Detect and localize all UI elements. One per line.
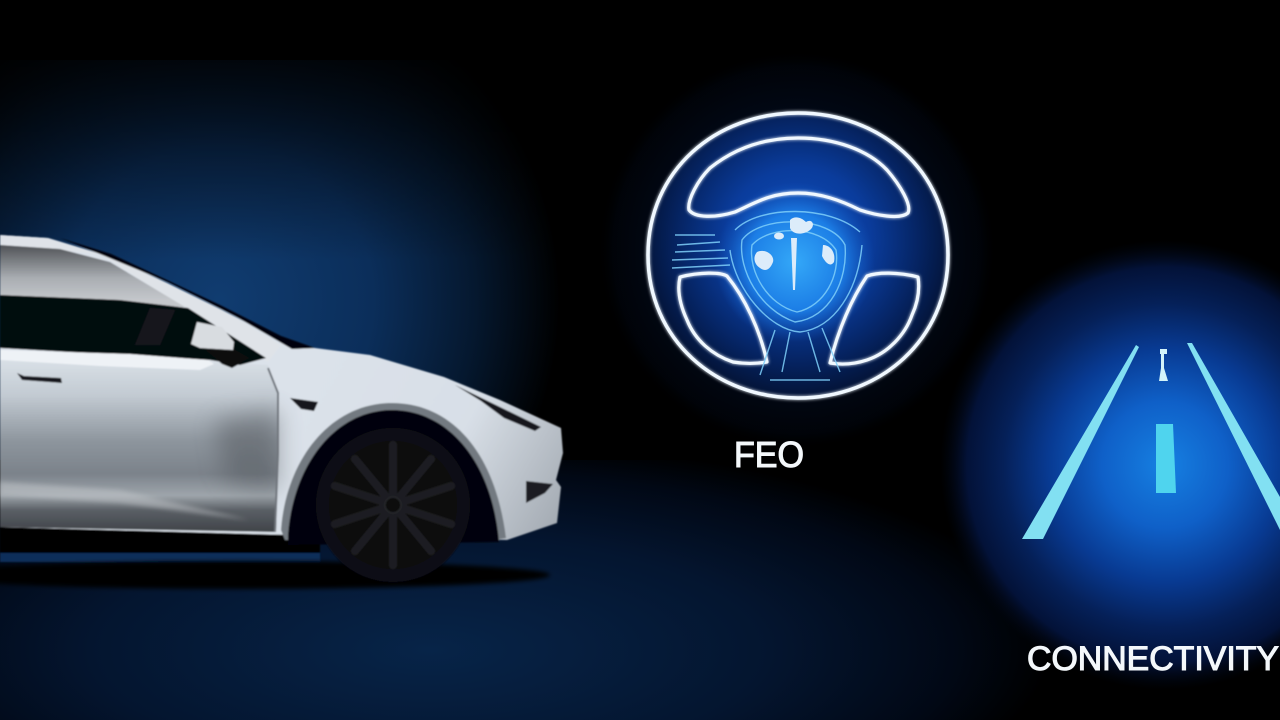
side window [0, 295, 266, 365]
headlight [455, 385, 541, 431]
side camera [290, 398, 318, 411]
roof rail [0, 235, 281, 362]
label: FEO: FEO [734, 434, 804, 475]
spokes [335, 445, 451, 565]
mirror stalk [205, 350, 250, 368]
outer rim [648, 113, 948, 398]
door handle [17, 373, 62, 383]
door shading [215, 410, 278, 490]
car body [0, 235, 563, 540]
upper spoke [689, 138, 909, 216]
door panel [0, 350, 278, 532]
windshield edge [60, 238, 315, 349]
hub lines [672, 211, 862, 380]
hub glow [720, 195, 870, 338]
far dash [1159, 349, 1168, 381]
steering wheel icon [612, 66, 981, 434]
centre dash [1156, 424, 1176, 493]
mirror [191, 322, 234, 350]
hub shapes [754, 217, 834, 290]
upper glass [0, 245, 185, 307]
wheel arch trim [281, 403, 506, 540]
label: connectivity: CONNECTIVITY [1027, 640, 1279, 678]
right hole [830, 273, 919, 364]
door top highlight [0, 350, 214, 370]
wheel [316, 428, 470, 582]
car [0, 235, 563, 589]
sill highlight [0, 482, 250, 520]
left hole [679, 273, 767, 364]
window interior [135, 308, 175, 345]
road icon [940, 240, 1280, 690]
left road line [1022, 345, 1139, 539]
road glow [940, 240, 1280, 690]
wheel disc [648, 113, 948, 398]
halo [597, 50, 997, 450]
right road line [1187, 343, 1280, 530]
wheel arch [288, 410, 499, 545]
lower intake [526, 481, 553, 503]
car shadow [0, 526, 550, 589]
door seam [268, 368, 278, 532]
